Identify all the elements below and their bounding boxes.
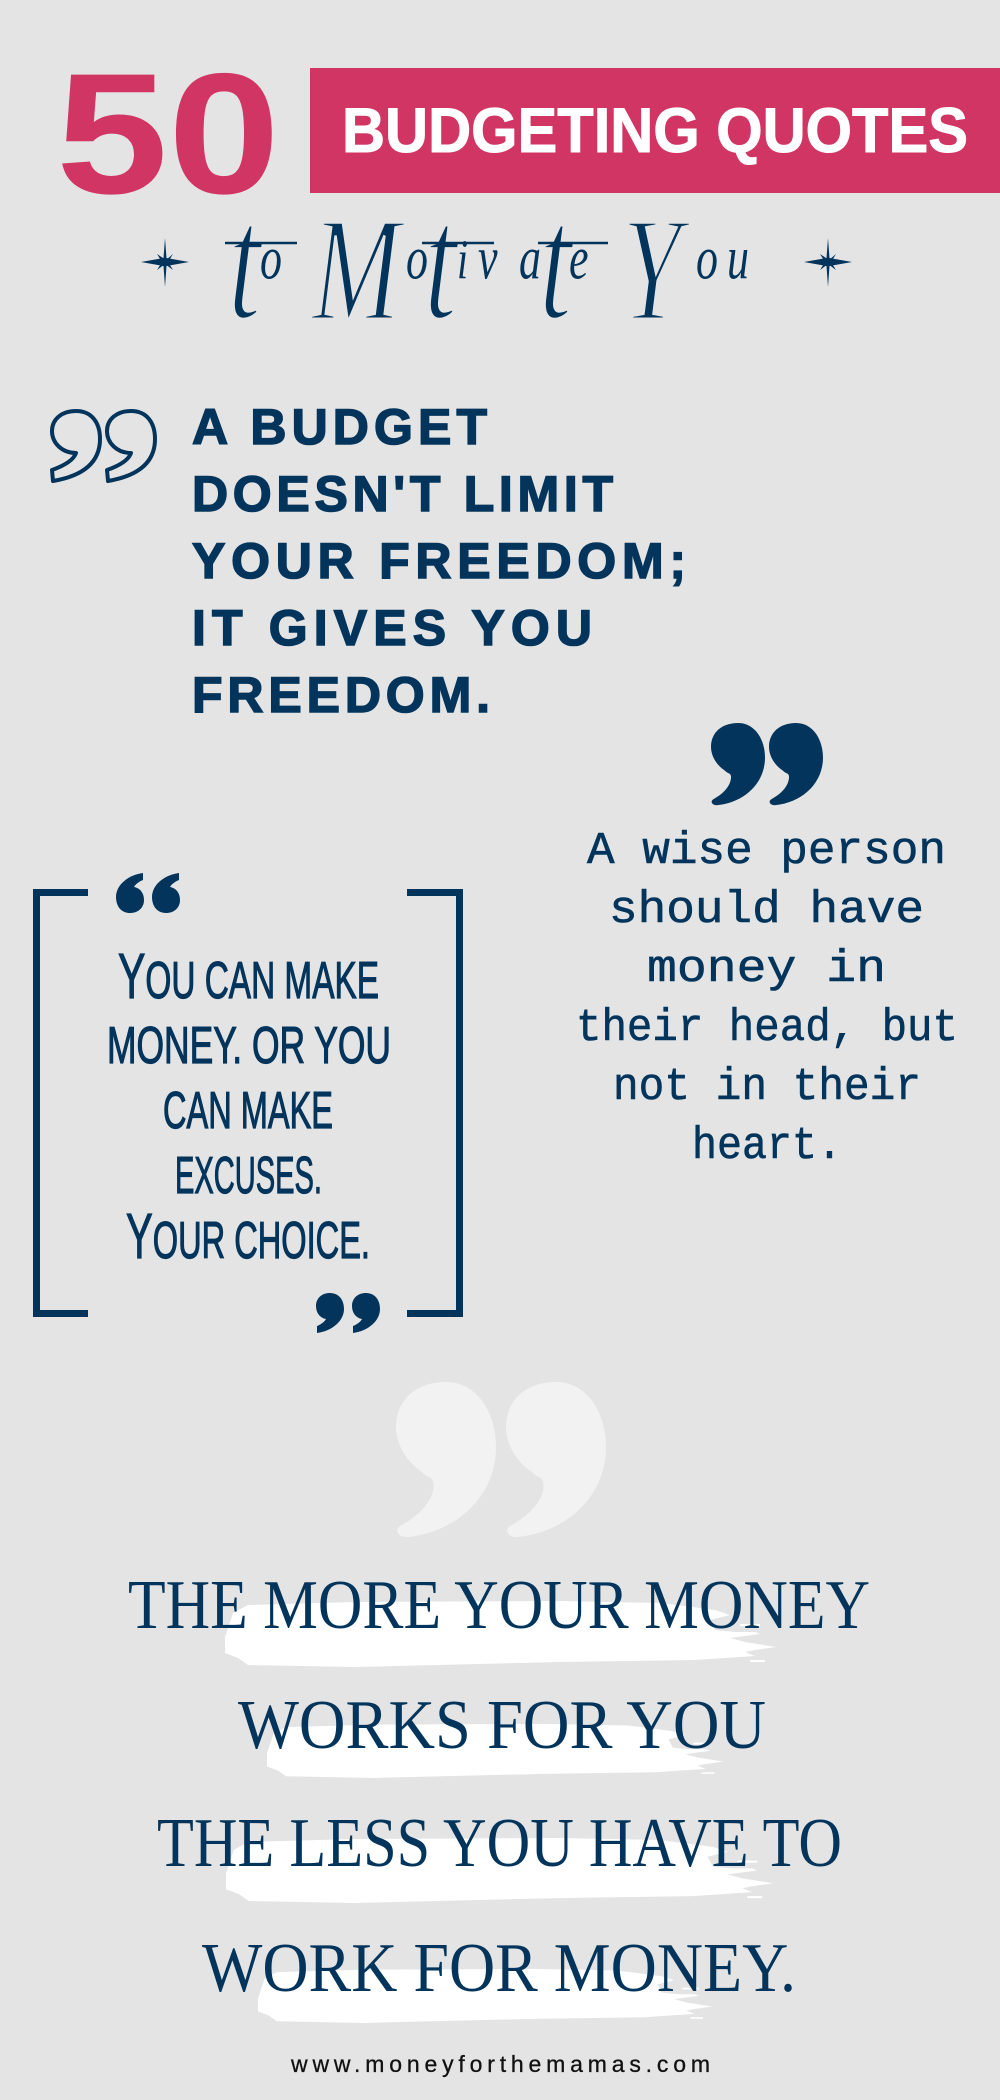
quote text: YOUR FREEDOM; [192, 533, 686, 589]
subtitle script: t [228, 172, 263, 355]
quote text: EXCUSES. [175, 1147, 322, 1205]
subtitle script: Y [622, 187, 691, 351]
subtitle script: t [424, 172, 459, 355]
quote text: not in their [613, 1062, 921, 1113]
banner: budgeting quotes: BUDGETING QUOTES [342, 96, 968, 166]
header [56, 38, 1000, 355]
icon: right sparkle [804, 238, 852, 287]
subtitle script: o [696, 223, 718, 292]
subtitle script: i [457, 229, 468, 291]
quote text: WORKS FOR YOU [238, 1687, 766, 1764]
quote text: A wise person [587, 826, 946, 877]
subtitle script: e [569, 223, 589, 292]
quote text: MONEY. OR YOU [107, 1017, 391, 1075]
quote text [192, 399, 686, 723]
quote text: heart. [692, 1121, 842, 1172]
quote text: money in [647, 944, 886, 995]
quote text [107, 940, 391, 1272]
quote text: THE MORE YOUR MONEY [128, 1567, 870, 1644]
quote text: should have [609, 885, 924, 936]
quote text: their head, but [576, 1003, 958, 1054]
footer url: www.moneyforthemamas.com [290, 2051, 710, 2077]
subtitle script [225, 172, 749, 355]
banner: budgeting quotes [310, 68, 1000, 193]
subtitle script: u [727, 223, 749, 292]
icon: solid quote mark [711, 723, 823, 805]
quote text: FREEDOM. [192, 667, 490, 723]
white brush strokes [225, 1601, 776, 2023]
quote text: DOESN'T LIMIT [192, 466, 613, 522]
subtitle script: o [406, 223, 428, 292]
quote text: YOU CAN MAKE [118, 940, 379, 1012]
icon: large pale quote mark [396, 1382, 606, 1537]
icon: opening quote mark [116, 873, 180, 913]
icon: closing quote mark [316, 1293, 380, 1333]
subtitle script: o [260, 223, 282, 292]
quote 3: bracketed box [36, 873, 460, 1333]
quote text: A BUDGET [192, 399, 487, 455]
quote text [128, 1567, 870, 2007]
icon: left sparkle [141, 238, 189, 287]
quote 4: the more your money [128, 1382, 870, 2023]
subtitle script: v [478, 223, 498, 292]
right bracket [407, 892, 460, 1314]
quote text [576, 826, 958, 1172]
number 50: 50 [56, 38, 280, 230]
quote text: WORK FOR MONEY. [202, 1930, 796, 2007]
quote text: YOUR CHOICE. [126, 1200, 370, 1272]
quote text: CAN MAKE [163, 1082, 333, 1140]
quote 1: a budget [52, 399, 686, 723]
quote 2: a wise person [576, 723, 958, 1172]
quote text: IT GIVES YOU [192, 600, 592, 656]
left bracket [36, 892, 88, 1314]
icon: outlined quote mark [52, 411, 155, 481]
subtitle script: M [310, 187, 406, 351]
subtitle script: a [519, 223, 541, 292]
subtitle script: t [539, 172, 574, 355]
quote text: THE LESS YOU HAVE TO [157, 1805, 842, 1882]
